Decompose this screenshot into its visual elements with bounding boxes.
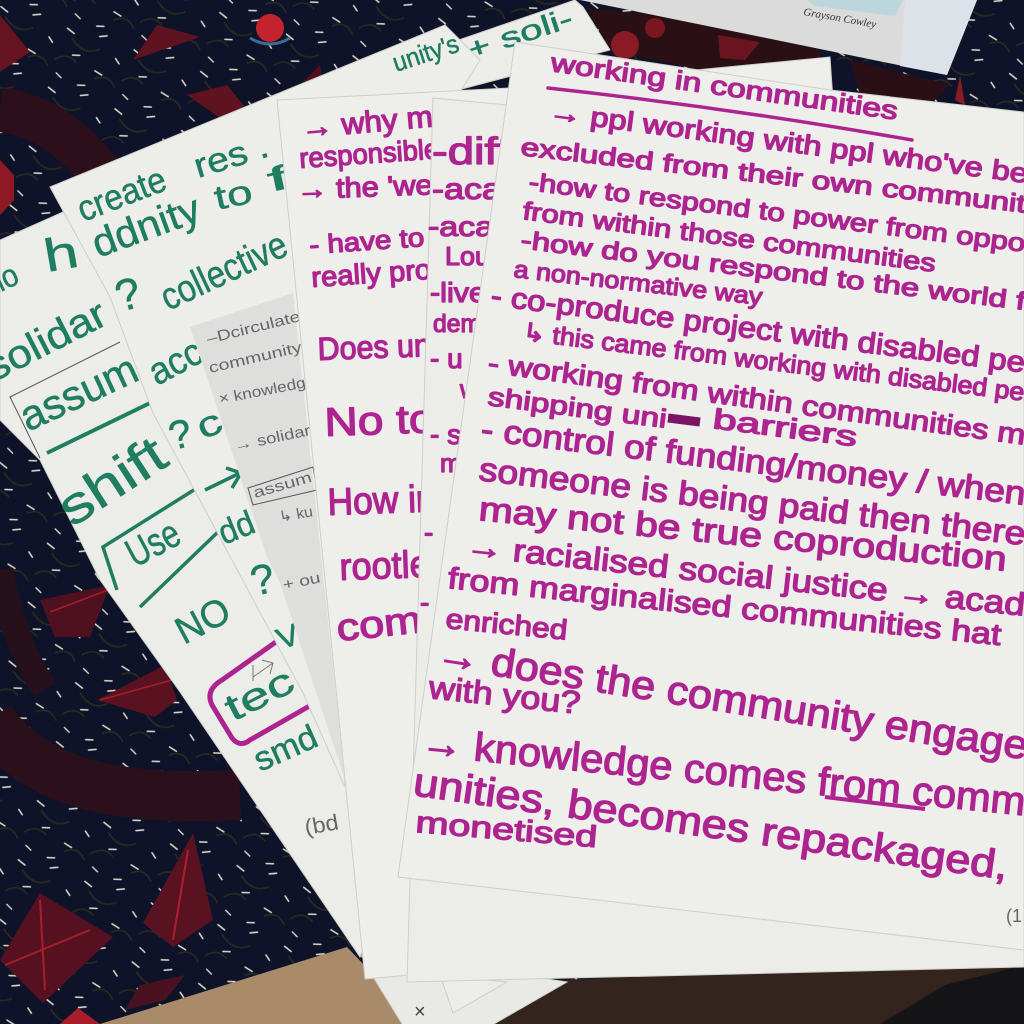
sheet: green create res	[50, 25, 480, 787]
note lines: -how do you respond to the world f	[519, 226, 1024, 316]
note lines: shipping uni	[486, 381, 669, 434]
heading underline	[548, 88, 912, 140]
dark furry object	[880, 965, 1024, 1024]
sheet: green create res: unity's	[389, 28, 463, 78]
note lines: ↳ this came from working with disabled pe	[521, 318, 1024, 407]
sheet: diff magenta notes: -aca	[432, 173, 502, 206]
sheet: diff magenta notes: dem	[433, 310, 481, 338]
small grey printed sheet: community	[207, 339, 304, 377]
note lines: → knowledge comes from comm	[419, 720, 1024, 824]
green note lines	[0, 225, 340, 840]
sheet: why magenta notes: com	[335, 599, 423, 650]
cross mark: ×	[414, 1001, 426, 1023]
green note lines: smd	[248, 718, 324, 779]
sheet: diff magenta notes: - s	[430, 419, 461, 450]
note lines: from within those communities	[521, 197, 937, 278]
sheet: diff magenta notes: -diff	[432, 131, 511, 173]
note lines: → does the community engage	[434, 631, 1024, 768]
sheet: why magenta notes: rootle	[339, 544, 430, 589]
note lines: → racialised social justice → acad	[464, 527, 1024, 623]
sheet: why magenta notes: - have to	[308, 222, 425, 260]
main sheet: working in communities	[398, 42, 1024, 950]
sheet: why magenta notes	[277, 57, 835, 979]
small grey printed sheet: × knowledg	[218, 374, 307, 408]
green note lines: (bd	[303, 809, 340, 840]
note lines: a non-normative way	[512, 256, 764, 311]
note lines: monetised	[414, 806, 599, 854]
sheet: diff magenta notes: -live	[430, 277, 486, 308]
sheet: green create res: collective	[154, 224, 294, 319]
dark table edge	[420, 960, 1024, 1024]
sheet: green create res: ddnity	[86, 187, 206, 266]
note lines: -how to respond to power from oppo	[527, 168, 1024, 258]
underline on from	[825, 797, 925, 809]
note lines: - control of funding/money / when	[479, 410, 1024, 512]
sheet: why magenta notes: → the 'we	[296, 169, 433, 205]
small grey printed sheet	[190, 293, 345, 780]
signature: Grayson Cowley	[802, 6, 877, 31]
sheet: why magenta notes: How in	[327, 478, 436, 524]
sheet: green create res: V	[272, 618, 304, 657]
sheet: green create res: ?	[246, 554, 279, 605]
note lines: may not be true coproduction	[477, 490, 1008, 579]
sheet: why magenta notes: Does uni	[317, 327, 438, 367]
note lines: excluded from their own communit	[519, 133, 1024, 218]
sheet: diff magenta notes: -	[420, 587, 429, 618]
small grey printed sheet: → solidar	[232, 422, 312, 455]
note lines: - working from within communities m	[486, 347, 1024, 451]
crossed out word	[668, 418, 700, 422]
bottom sheet	[360, 950, 567, 1024]
sheet: diff magenta notes: w	[459, 374, 479, 404]
note lines: unities, becomes repackaged,	[411, 760, 1011, 888]
note lines: enriched	[444, 603, 569, 646]
green note lines: tec	[218, 660, 301, 730]
sheet: green create res: create	[71, 158, 172, 229]
sheet: green create res: res .	[189, 127, 273, 186]
note lines	[411, 96, 1024, 888]
sheet: green create res: dd	[213, 504, 260, 552]
note lines: someone is being paid then there	[477, 450, 1024, 552]
sheet: green create res: acc	[142, 331, 210, 394]
sheet: why magenta notes: responsible	[298, 133, 440, 174]
sheet: green create res: to	[211, 173, 256, 218]
small grey printed sheet: –Dcirculate	[205, 308, 302, 348]
sheet: diff magenta notes: -	[424, 517, 433, 548]
heading: working in communities	[548, 47, 900, 126]
small grey printed sheet: assum	[251, 469, 314, 502]
green mark sheet	[440, 975, 507, 1013]
sheet: diff magenta notes: -aca	[428, 211, 495, 242]
sheet: green create res: ?	[165, 411, 196, 459]
sheet: why magenta notes: No to	[324, 397, 435, 445]
sheet: far left green notes	[0, 212, 420, 957]
top right printed sheet	[580, 0, 977, 75]
note lines: → ppl working with ppl who've be	[547, 96, 1024, 189]
sheet: solidarity behind	[293, 0, 610, 100]
sheet: diff magenta notes: m	[440, 448, 462, 478]
sheet: diff magenta notes: - u	[430, 343, 463, 374]
wooden table	[100, 947, 420, 1024]
page number: (1	[1006, 906, 1022, 926]
sheet: green create res: ?	[110, 268, 146, 322]
sheet: why magenta notes: → why m	[300, 101, 434, 145]
note lines: from marginalised communities hat	[446, 562, 1004, 652]
note lines: with you?	[426, 669, 582, 721]
green note lines: h	[40, 225, 82, 282]
small grey printed sheet: ↳ ku	[278, 503, 314, 526]
green note lines: Use	[119, 511, 188, 576]
green note lines: NO	[169, 590, 238, 653]
sheet: green create res: f	[264, 158, 294, 200]
sheet: why magenta notes: really pro	[310, 254, 432, 293]
sheet: diff magenta notes: Lou	[445, 241, 490, 271]
green note lines: shift	[47, 425, 178, 538]
note lines: - co-produce project with disabled pe	[489, 280, 1024, 379]
green note lines: assum	[12, 345, 145, 440]
sheet: solidarity behind: + soli-	[462, 2, 576, 66]
note lines: barriers	[711, 403, 859, 452]
sheet: green create res: c	[190, 400, 228, 447]
small grey printed sheet: + ou	[281, 569, 322, 594]
sheet: diff magenta notes	[407, 85, 1024, 982]
